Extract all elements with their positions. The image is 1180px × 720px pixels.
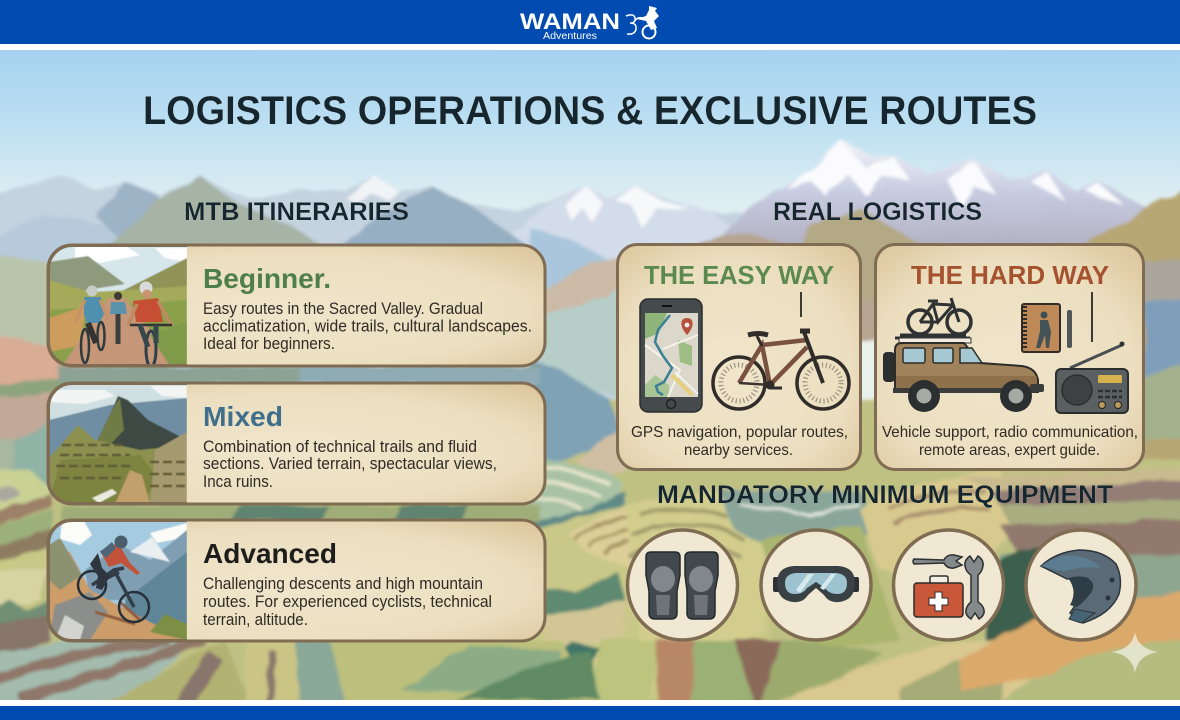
icon: smartphone with map (640, 299, 702, 412)
middle strip (530, 228, 620, 300)
heading: real logistics: REAL LOGISTICS (773, 198, 982, 226)
body text (203, 300, 532, 353)
bottom terraces left (0, 635, 200, 705)
logo (520, 6, 659, 42)
cyclist blue (76, 286, 108, 363)
heading: MTB itineraries: MTB ITINERARIES (184, 198, 409, 226)
base land under the fields (0, 400, 1180, 720)
left strip (0, 255, 120, 345)
body text (203, 438, 497, 491)
caption (631, 424, 848, 459)
lower fields (530, 490, 780, 700)
heading: Mixed (203, 401, 283, 432)
right tan flank (1040, 186, 1180, 460)
icon: sparkle watermark (1112, 632, 1158, 673)
equipment: full-face helmet (1026, 530, 1136, 640)
icon: notebook with hiker (1022, 304, 1072, 352)
panel: Mixed itinerary (48, 383, 545, 504)
caption (882, 424, 1138, 459)
caption: Vehicle support, radio communication, (882, 424, 1138, 441)
cyclist red (128, 282, 172, 367)
footer bar (0, 700, 1180, 720)
body text: acclimatization, wide trails, cultural landscapes. (203, 318, 532, 336)
icon: cyclist logo (626, 6, 659, 38)
panel: the easy way (618, 244, 860, 470)
heading: THE HARD WAY (911, 262, 1109, 290)
panel: Advanced itinerary (48, 520, 545, 641)
equipment: goggles (761, 530, 871, 640)
body text: Combination of technical trails and fluid (203, 438, 477, 456)
header bar (0, 0, 1180, 50)
heading: THE EASY WAY (644, 262, 834, 290)
cyclist middle (110, 292, 127, 344)
body text: Inca ruins. (203, 473, 273, 491)
icon: radio (1056, 342, 1128, 413)
caption: nearby services. (684, 442, 793, 459)
logo: Adventures (543, 30, 597, 42)
equipment: first aid and tools (894, 530, 1004, 640)
panel: Beginner itinerary (48, 245, 545, 367)
big snowy massif (650, 140, 1180, 320)
body text: Challenging descents and high mountain (203, 575, 483, 593)
body text: Ideal for beginners. (203, 335, 335, 353)
left mid mountains (90, 176, 360, 290)
panel: the hard way (876, 244, 1144, 470)
bottom terrain right (590, 640, 660, 705)
body text: terrain, altitude. (203, 611, 308, 629)
heading: Advanced (203, 538, 337, 569)
divider tick (1091, 292, 1093, 342)
image: cyclists in valley (49, 246, 187, 367)
far ridge (0, 176, 760, 420)
heading: Beginner. (203, 263, 331, 294)
equipment: knee pads (628, 530, 738, 640)
icon: bike on roof (908, 298, 971, 334)
body text: routes. For experienced cyclists, technical (203, 593, 492, 611)
logo: WAMAN (520, 9, 620, 34)
caption: GPS navigation, popular routes, (631, 424, 848, 441)
caption: remote areas, expert guide. (919, 442, 1100, 459)
heading: mandatory minimum equipment: MANDATORY MINIMUM EQUIPMENT (657, 481, 1113, 509)
image: Inca ruins (49, 384, 187, 504)
body text: Easy routes in the Sacred Valley. Gradual (203, 300, 483, 318)
divider tick (800, 292, 802, 317)
icon: off-road vehicle (883, 335, 1044, 412)
rider (78, 536, 149, 622)
image: downhill rider (49, 521, 187, 641)
body text: sections. Varied terrain, spectacular views, (203, 455, 497, 473)
body text (203, 575, 492, 629)
icon: mountain bike (713, 331, 849, 409)
right fields (625, 490, 800, 640)
title: LOGISTICS OPERATIONS & EXCLUSIVE ROUTES (143, 89, 1037, 133)
